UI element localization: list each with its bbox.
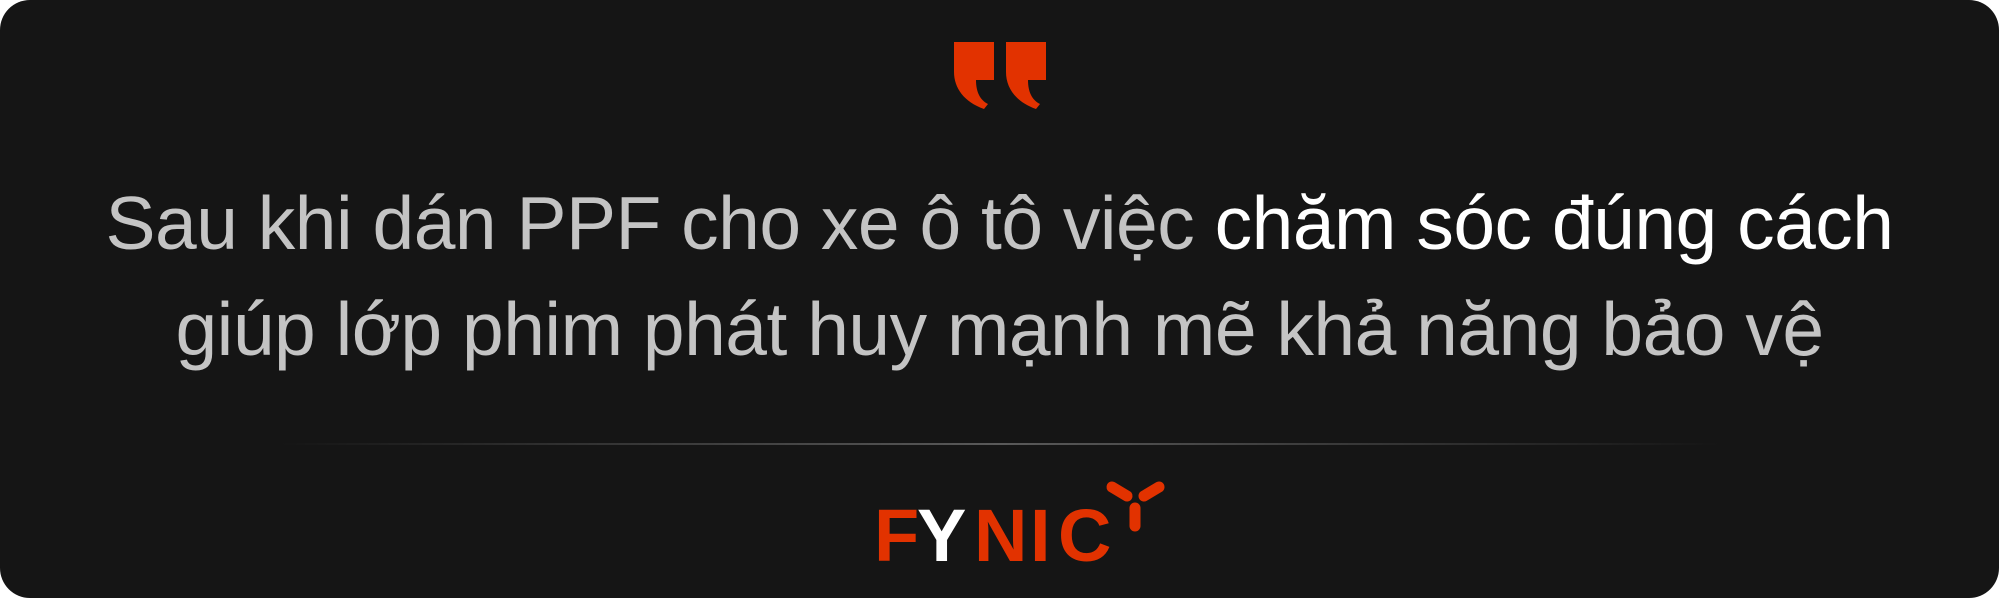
logo: FYNIC: C [1058, 494, 1111, 577]
logo: FYNIC: F [874, 494, 919, 577]
logo: FYNIC: Y [917, 494, 966, 577]
logo: FYNIC: I [1030, 494, 1051, 577]
icon: quote mark [954, 42, 1046, 109]
quote text [105, 181, 1894, 371]
logo: FYNIC [874, 482, 1164, 577]
quote text: giúp lớp phim phát huy mạnh mẽ khả năng bảo vệ [175, 287, 1824, 371]
logo: FYNIC: N [974, 494, 1027, 577]
quote text: Sau khi dán PPF cho xe ô tô việc chăm sóc đúng cách [105, 181, 1894, 265]
